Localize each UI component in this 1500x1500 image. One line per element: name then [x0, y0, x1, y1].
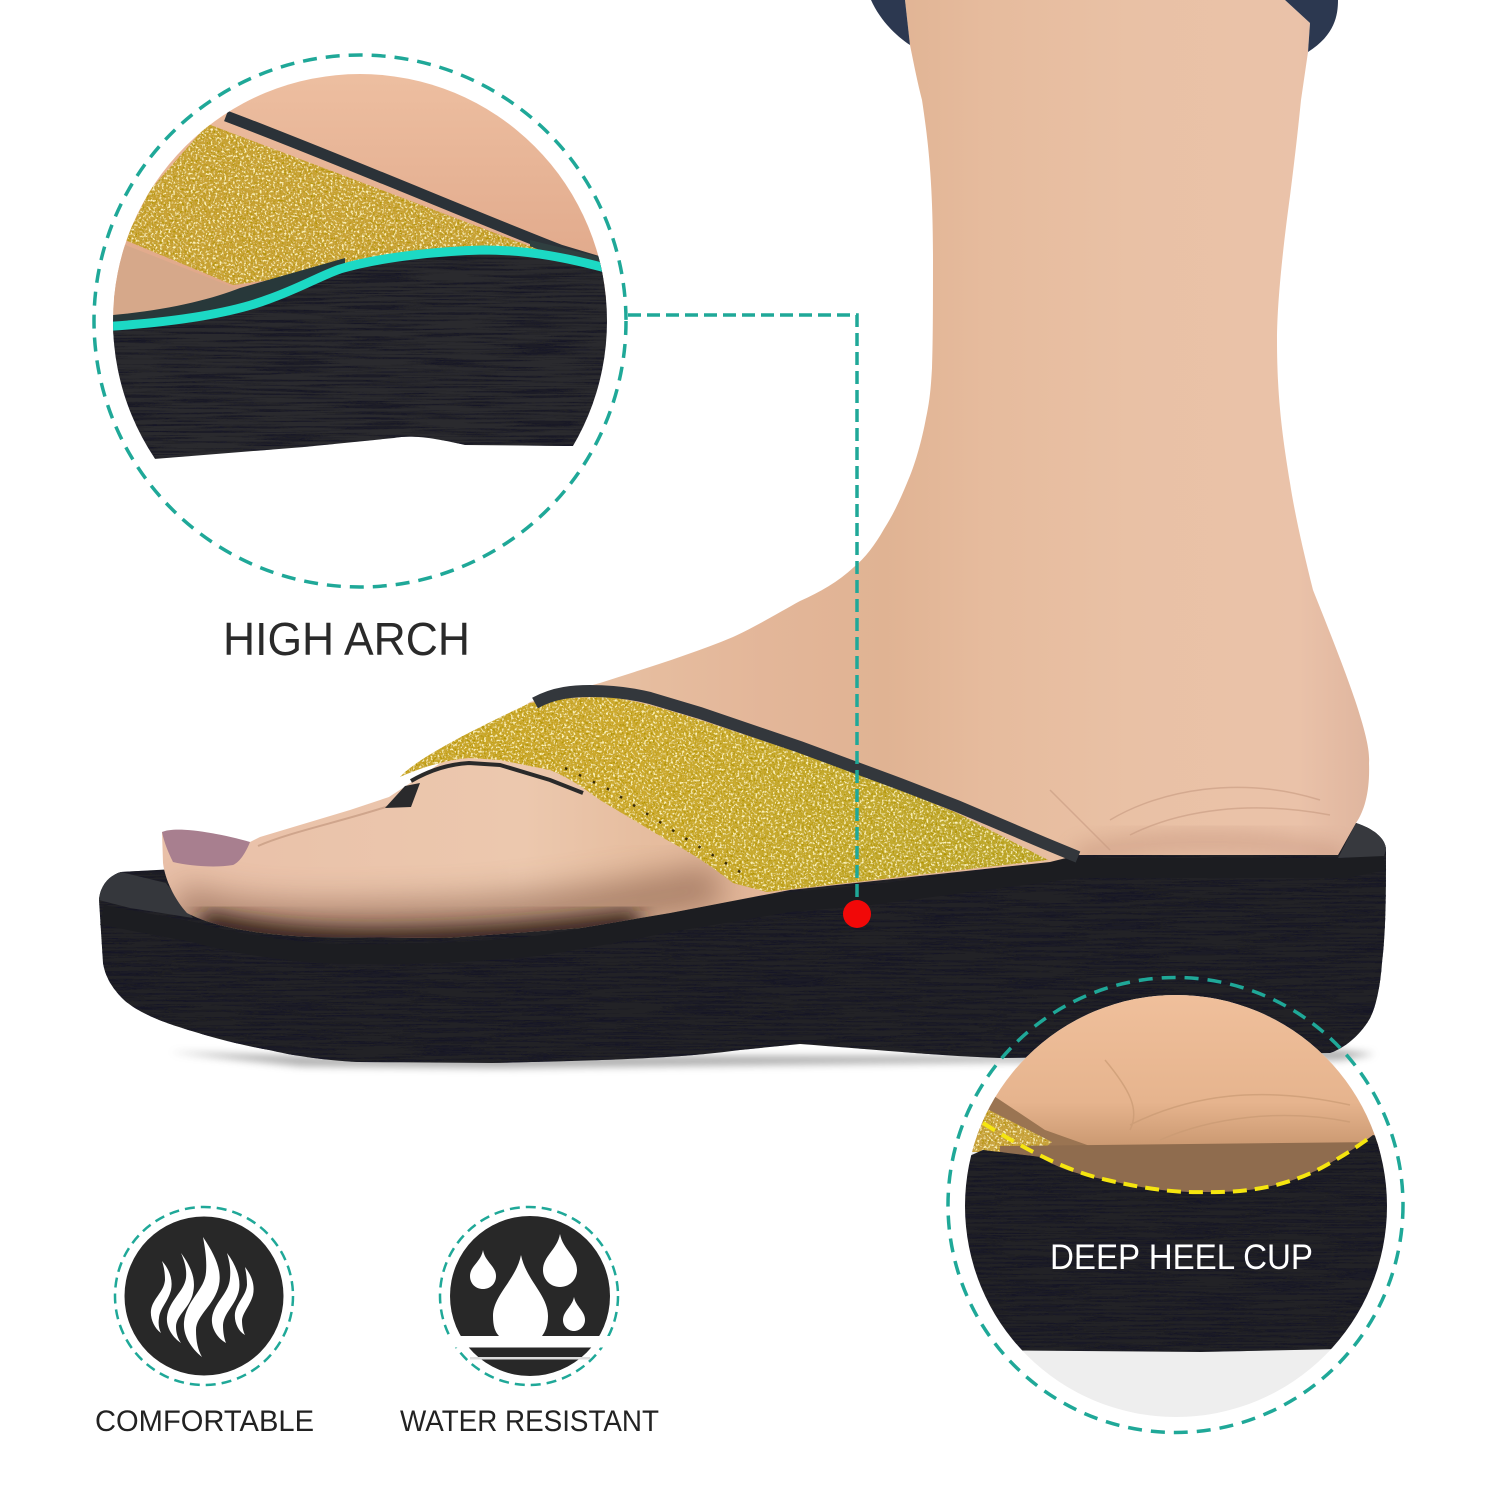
ground shadow — [170, 1050, 1375, 1068]
panel: deep heel cup detail — [948, 978, 1403, 1432]
label: comfortable: COMFORTABLE — [95, 1405, 314, 1438]
pant cuffs — [871, 0, 1338, 52]
sole close-up — [100, 252, 620, 462]
strap piping — [535, 691, 1078, 857]
toe insole — [99, 872, 193, 918]
heel rim — [1338, 823, 1386, 858]
close-up photo — [960, 990, 1392, 1420]
close-up photo — [113, 74, 607, 459]
heel creases — [1050, 787, 1330, 850]
panel: high arch detail — [94, 55, 626, 590]
connector line to high arch — [628, 315, 857, 905]
heading: high arch: HIGH ARCH — [223, 613, 470, 665]
strap stitching — [565, 768, 745, 875]
label: deep heel cup: DEEP HEEL CUP — [1050, 1238, 1313, 1277]
toenail — [162, 830, 250, 866]
red marker dot — [843, 900, 871, 928]
gold glitter strap — [400, 697, 1048, 892]
thong post — [385, 783, 420, 808]
icon: water resistant drops — [440, 1207, 620, 1385]
glitter strap — [125, 124, 545, 285]
icon: comfortable waves — [115, 1207, 293, 1385]
strap edge — [226, 116, 620, 268]
foot shading — [1075, 842, 1345, 858]
dashed ring — [94, 55, 626, 587]
teal insole line — [100, 250, 620, 327]
toe crease — [258, 806, 389, 846]
sandal sole — [99, 823, 1386, 1063]
leg and foot — [162, 0, 1369, 943]
dashed ring — [948, 978, 1403, 1432]
product photo: foot in sandal — [99, 0, 1386, 1068]
sole smooth top band — [102, 860, 1384, 954]
label: water resistant: WATER RESISTANT — [400, 1405, 659, 1438]
yellow heel cup line — [983, 1123, 1373, 1192]
